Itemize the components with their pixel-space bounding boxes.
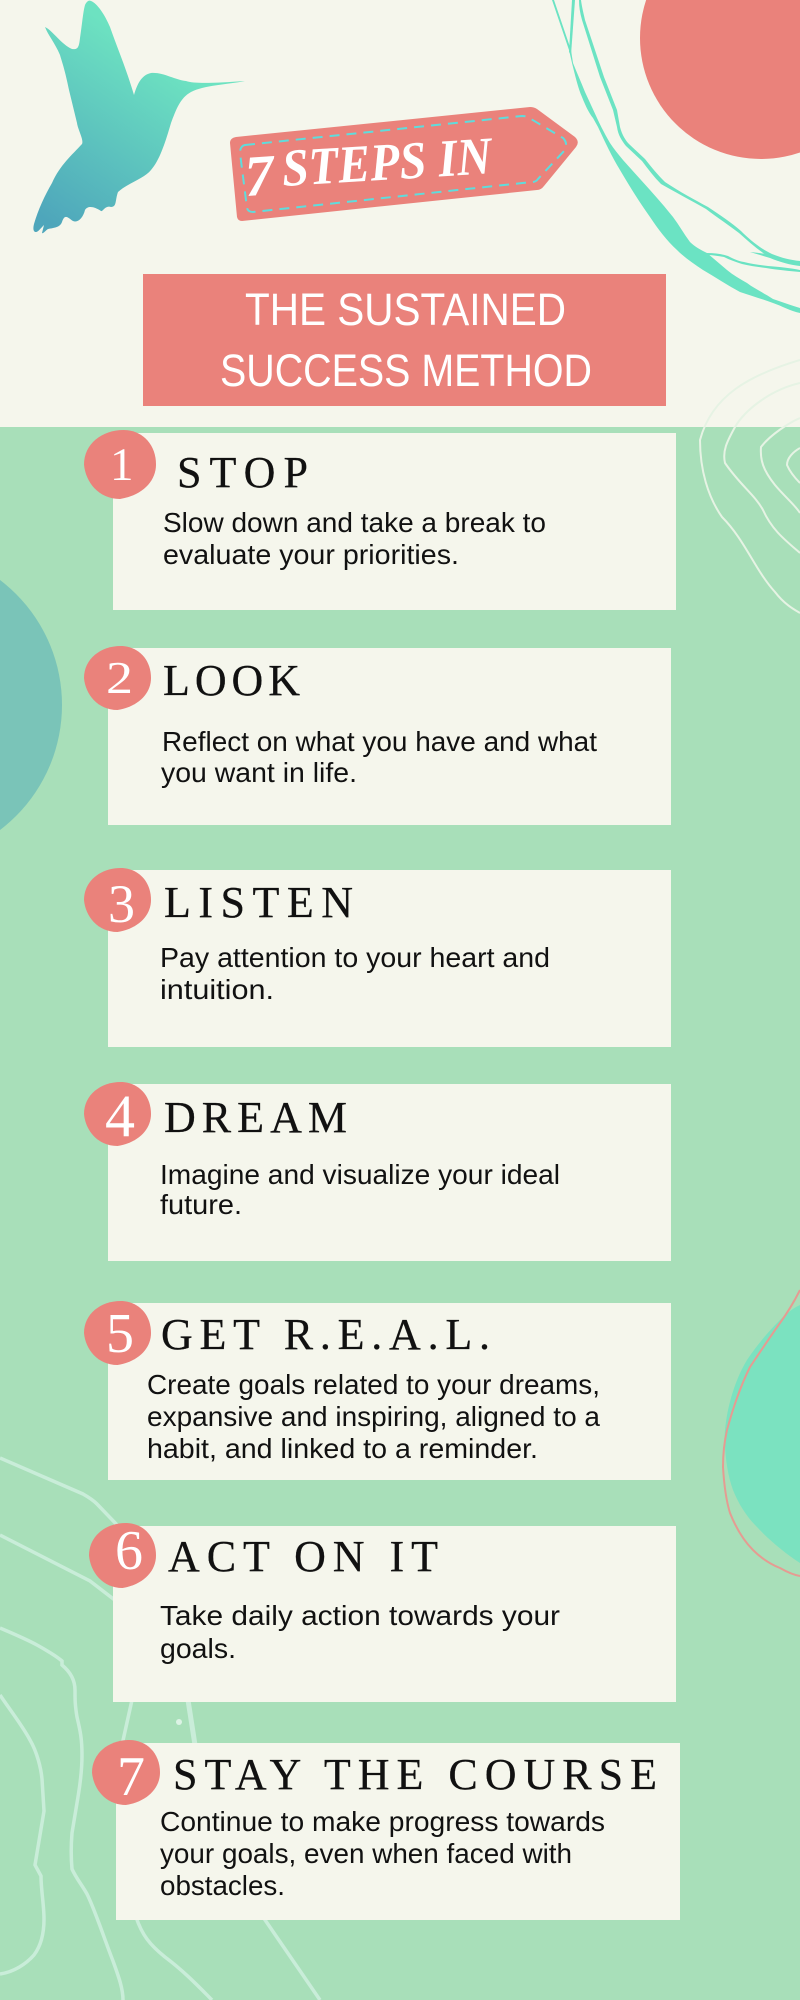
number badge 6 [89, 1523, 156, 1588]
number badge 7 [92, 1740, 160, 1805]
description: Slow down and take a break to [163, 507, 546, 538]
header background [0, 0, 800, 427]
number badge 5 [84, 1301, 151, 1365]
description [160, 1600, 560, 1664]
heading STOP: STOP [177, 448, 308, 497]
description: intuition. [160, 974, 274, 1005]
description: habit, and linked to a reminder. [147, 1433, 538, 1464]
step 3 panel [84, 868, 671, 1047]
description [160, 1806, 605, 1901]
decorative white contour lines top right [700, 360, 800, 613]
heading STAY THE COURSE: STAY THE COURSE [173, 1750, 657, 1799]
heading GET R.E.A.L.: GET R.E.A.L. [161, 1310, 490, 1359]
step 6 panel [89, 1520, 676, 1702]
decorative teal branches [552, 0, 800, 313]
number badge 3 [84, 868, 151, 932]
heading ACT ON IT: ACT ON IT [168, 1532, 438, 1581]
decorative teal blob right [725, 1305, 800, 1563]
description [163, 507, 546, 570]
description [160, 1159, 560, 1220]
description: expansive and inspiring, aligned to a [147, 1401, 600, 1432]
decorative coral outline right [723, 1290, 800, 1576]
title panel [143, 274, 666, 406]
title line 1: THE SUSTAINED [245, 284, 566, 335]
description: your goals, even when faced with [160, 1838, 572, 1869]
description: goals. [160, 1633, 236, 1664]
description: Imagine and visualize your ideal [160, 1159, 560, 1190]
decorative coral circle [640, 0, 800, 159]
tag: 7 steps in: STEPS IN [280, 127, 495, 198]
number badge 2 [84, 646, 151, 710]
description: evaluate your priorities. [163, 539, 459, 570]
number 5: 5 [106, 1303, 134, 1365]
hummingbird icon [33, 1, 245, 233]
description: Continue to make progress towards [160, 1806, 605, 1837]
description [161, 726, 597, 788]
number 3: 3 [108, 874, 135, 934]
description: Take daily action towards your [160, 1600, 560, 1631]
small contour dot [176, 1719, 182, 1725]
step 2 panel [84, 646, 671, 825]
description: future. [160, 1189, 242, 1220]
number 2: 2 [106, 652, 133, 703]
number 7: 7 [117, 1746, 145, 1808]
description: you want in life. [161, 757, 357, 788]
heading DREAM: DREAM [164, 1093, 347, 1142]
decorative contour lines bottom left [0, 1458, 320, 2000]
description: obstacles. [160, 1870, 285, 1901]
step 4 panel [84, 1082, 671, 1261]
decorative teal circle left [0, 548, 62, 862]
step 5 panel [84, 1301, 671, 1480]
number 4: 4 [105, 1083, 135, 1149]
description [147, 1369, 600, 1464]
number badge 1 [84, 430, 156, 499]
number 6: 6 [115, 1520, 143, 1582]
step 7 panel [92, 1740, 680, 1920]
tag: 7 steps in: 7 [242, 142, 278, 209]
step 1 panel [84, 430, 676, 610]
number badge 4 [84, 1082, 151, 1146]
description: Pay attention to your heart and [160, 942, 550, 973]
description [160, 942, 550, 1005]
heading LOOK: LOOK [163, 656, 300, 705]
description: Create goals related to your dreams, [147, 1369, 600, 1400]
number 1: 1 [110, 439, 134, 491]
body background [0, 427, 800, 2000]
description: Reflect on what you have and what [162, 726, 597, 757]
title line 2: SUCCESS METHOD [220, 345, 592, 396]
heading LISTEN: LISTEN [164, 878, 353, 927]
tag: 7 steps in [230, 107, 578, 221]
